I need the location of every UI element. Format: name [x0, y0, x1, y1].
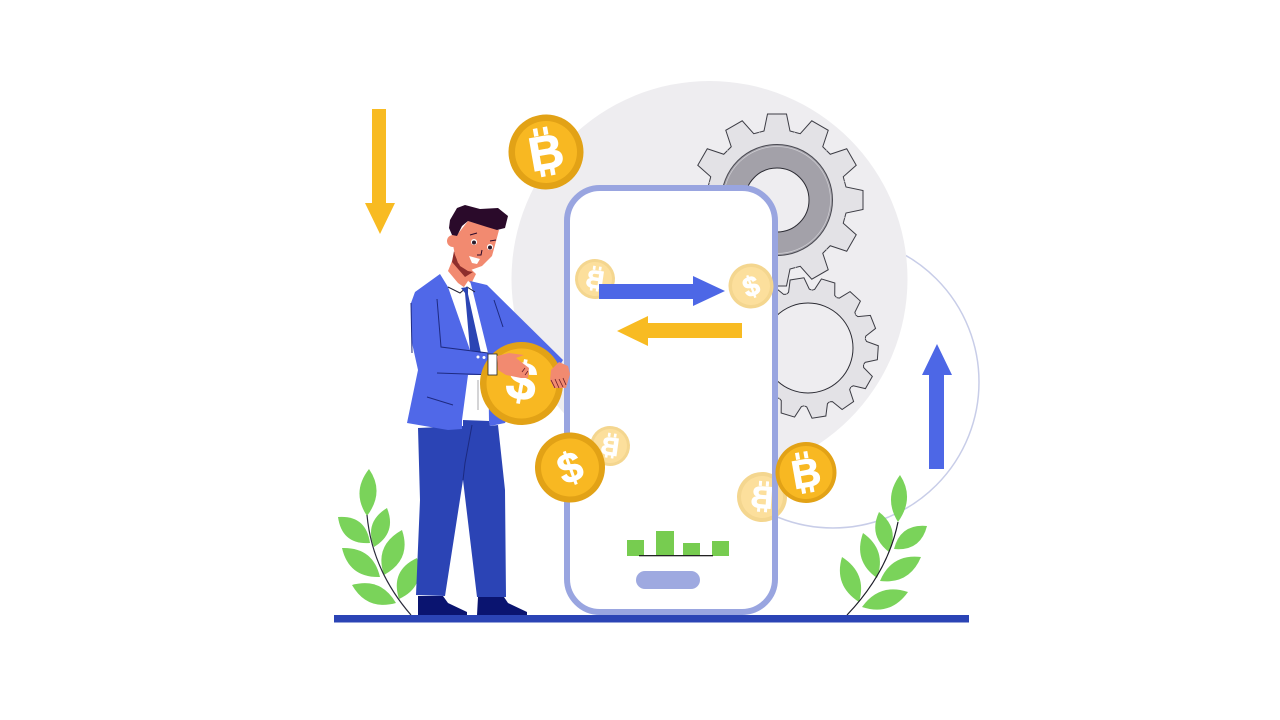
icon: small gear — [727, 268, 889, 428]
background grey circle — [512, 81, 908, 477]
jacket left edge — [411, 303, 412, 353]
trousers — [416, 420, 506, 597]
bitcoin coin bottom right: B — [788, 450, 824, 498]
face — [453, 221, 499, 271]
right hand — [550, 362, 570, 388]
background outline circle — [687, 236, 979, 528]
bitcoin coin top — [503, 109, 589, 195]
plant: right — [840, 475, 927, 615]
arrow: blue right — [599, 276, 725, 306]
phone body — [567, 188, 775, 612]
faded bitcoin coin top left in phone — [572, 256, 618, 302]
left hand finger lines — [522, 368, 528, 375]
plant: left — [338, 469, 419, 615]
shirt seam — [477, 380, 479, 410]
dollar coin bottom: $ — [551, 441, 589, 494]
neck shadow — [452, 251, 473, 277]
faded bitcoin coin lower middle: B — [599, 432, 621, 462]
arrow: yellow left — [617, 316, 742, 346]
hair — [449, 205, 508, 236]
bitcoin coin bottom right — [771, 437, 841, 508]
faded dollar coin right in phone — [722, 257, 780, 315]
large dollar coin: $ — [502, 349, 542, 414]
arrow: yellow down — [365, 109, 395, 234]
jacket detail lines — [427, 299, 503, 405]
dollar coin bottom — [525, 423, 615, 512]
bar chart — [627, 531, 729, 556]
eyes — [471, 239, 493, 250]
ear — [447, 235, 459, 247]
shirt — [440, 275, 489, 421]
shoes — [418, 596, 527, 615]
faded dollar coin right in phone: $ — [739, 269, 764, 304]
tie — [461, 287, 481, 353]
neck — [448, 253, 476, 290]
sleeve cuff — [476, 354, 497, 375]
trouser crease — [463, 425, 472, 480]
jacket right side — [470, 281, 563, 426]
mouth — [469, 256, 480, 264]
arrow: blue up — [922, 344, 952, 469]
jacket body and sleeve — [407, 274, 497, 430]
faded bitcoin coin lower right — [735, 470, 789, 524]
phone right edge over coin — [772, 440, 778, 579]
eyebrows and nose — [470, 233, 496, 255]
ground line — [334, 615, 969, 622]
phone home button — [636, 571, 700, 589]
faded bitcoin coin lower right: B — [750, 479, 774, 516]
faded bitcoin coin top left in phone: B — [584, 265, 606, 295]
icon: large gear — [691, 114, 863, 286]
person — [407, 205, 570, 615]
bitcoin coin top: B — [525, 124, 568, 183]
faded bitcoin coin lower middle — [587, 423, 633, 469]
large dollar coin — [473, 335, 570, 432]
left hand — [497, 353, 529, 378]
right hand finger lines — [551, 378, 566, 388]
collar line — [448, 287, 475, 293]
